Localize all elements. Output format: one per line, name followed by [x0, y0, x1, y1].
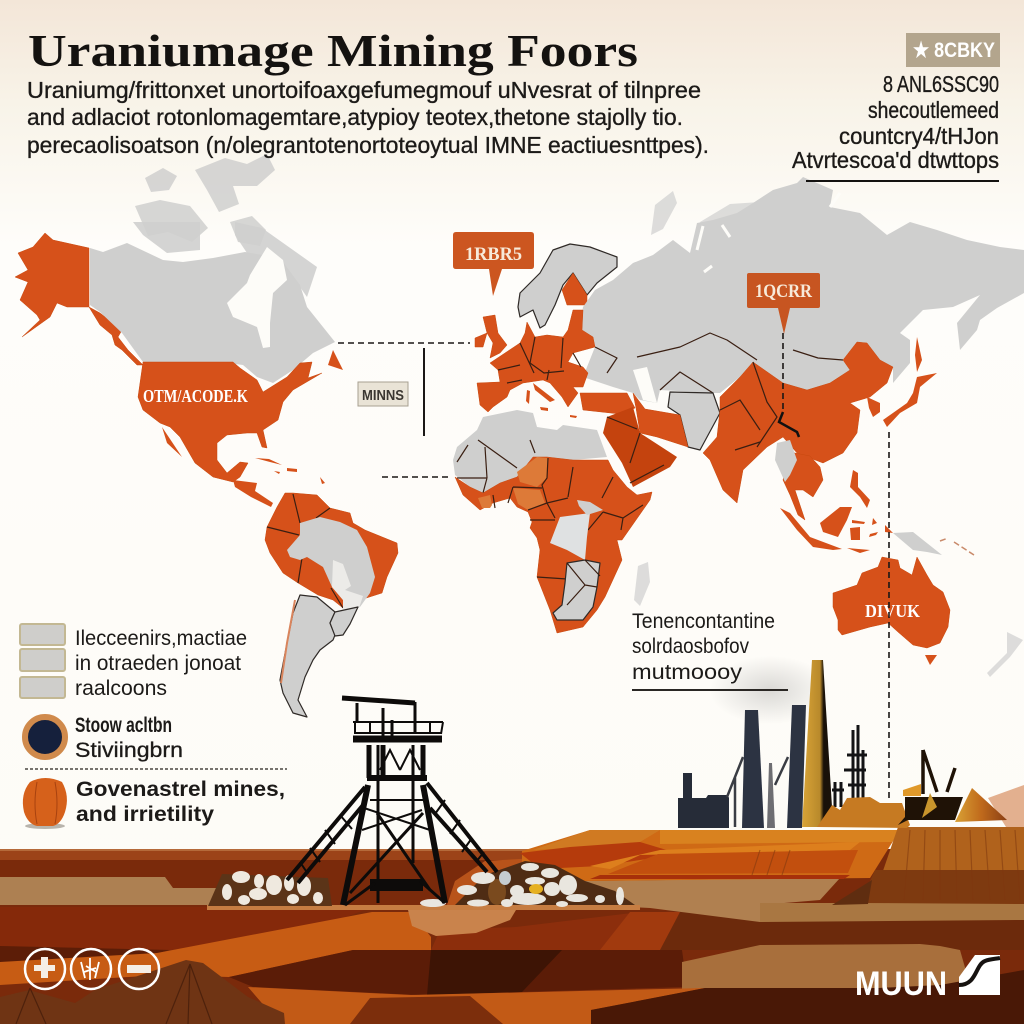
region: Arctic bays: [697, 193, 840, 272]
intro paragraph: perecaolisoatson (n/olegrantotenortoteoytual IMNE eactiuesnttpes).: [27, 132, 709, 158]
label: United States: OTM/ACODE.K: [143, 386, 248, 406]
region: Philippines: [850, 470, 870, 508]
rock pile: right: [420, 861, 635, 907]
region: Caspian Sea: [633, 367, 657, 403]
map annotation text: mutmoooy: [632, 661, 743, 684]
region: Myanmar dark border: [779, 412, 799, 437]
region: Baja California: [162, 427, 182, 457]
region: Pacific islands: [940, 538, 974, 555]
callout flag: Asia: 1QCRR: [755, 281, 812, 302]
region: Canada: [90, 243, 335, 383]
factory building: [678, 773, 729, 828]
legend item: conventional mines: Govenastrel mines,: [76, 778, 285, 801]
region: Afghanistan and Pakistan: [668, 392, 720, 450]
region: Central Africa interior: [550, 513, 590, 560]
ground platform: [207, 905, 640, 910]
gray chimney: [767, 763, 775, 828]
rock pile: left: [208, 871, 332, 906]
region: North Africa: [453, 410, 607, 493]
icon: plant: [71, 949, 111, 989]
bottom right dark: [591, 970, 1024, 1024]
region: Central Asia border lines: [595, 333, 843, 393]
region: Turkey: [580, 393, 635, 414]
world map: [15, 154, 1024, 717]
mid-map label box: MINNS: [362, 387, 404, 404]
top right callout: Atvrtescoa'd dtwttops: [792, 147, 999, 173]
region: northern fragments: [651, 191, 760, 235]
tan shield: [408, 910, 516, 936]
callout flag: Asia: [747, 273, 820, 334]
tan band left: [0, 877, 222, 905]
right dark band: [640, 912, 1024, 950]
region: Java and small islands: [847, 518, 893, 553]
map annotation text: [632, 610, 788, 690]
label: Australia: DIVUK: [865, 601, 920, 621]
logo: [855, 955, 1000, 1003]
region: Iran: [633, 393, 688, 447]
region: Italy and islands: [526, 383, 577, 418]
region: Chile edge: [281, 600, 295, 683]
legend item: reserves: in otraeden jonoat: [75, 652, 241, 675]
region: British Isles: [475, 315, 507, 358]
legend item: conventional mines: [23, 778, 285, 829]
map annotation text: solrdaosbofov: [632, 635, 749, 658]
region: Thailand interior: [775, 440, 797, 482]
smoke: [710, 656, 830, 724]
icon: plus: [25, 949, 65, 989]
striped hill: [873, 827, 1024, 904]
region: Korea: [867, 397, 880, 417]
region: East Africa lake: [577, 500, 603, 515]
region: Sub-Saharan Africa: [455, 457, 652, 633]
intro paragraph: [27, 77, 709, 158]
badge: ★ 8CBKY: [913, 39, 995, 62]
region: Indochina: [783, 452, 823, 520]
mine headframe tower: [287, 698, 497, 905]
mid-map label box: [358, 382, 408, 406]
icon row: [25, 949, 159, 989]
landscape: strata: [0, 827, 1024, 1024]
region: Central America: [233, 480, 273, 507]
chimney left: [742, 710, 764, 828]
region: New Guinea: [893, 532, 942, 555]
dark seam: [0, 946, 170, 962]
tan block right: [682, 944, 970, 991]
patch behind right rocks: [447, 857, 555, 905]
region: Eurasia: [580, 177, 1024, 403]
terrace: [522, 830, 900, 881]
top right callout: countcry4/tHJon: [839, 123, 999, 149]
intro paragraph: and adlaciot rotonlomagemtare,atypioy teotex,thetone stajolly tio.: [27, 104, 683, 130]
region: India and China: [703, 342, 893, 503]
region: Southern cone: [280, 595, 335, 717]
legend item: storage: [25, 714, 183, 762]
excavator: [898, 750, 963, 825]
region: South America north: [265, 493, 398, 608]
region: Hudson Bay: [227, 247, 287, 348]
region: Caribbean: [255, 458, 325, 484]
region: Alaska: [15, 233, 89, 337]
region: Arabia: [603, 407, 677, 487]
logo: MUUN: [855, 965, 947, 1003]
foreground hill texture: [16, 964, 212, 1024]
lower orange band: [248, 987, 705, 1024]
region: Newfoundland: [328, 350, 343, 370]
region: New Zealand: [987, 632, 1023, 677]
legend item: storage: Stiviingbrn: [75, 739, 183, 762]
callout flag: Europe: 1RBR5: [465, 244, 522, 265]
region: Uruguay: [330, 607, 358, 636]
legend: [20, 624, 287, 829]
legend item: conventional mines: and irrietility: [76, 803, 214, 826]
rock piles: [207, 861, 640, 910]
crane arms: [727, 757, 788, 827]
region: Sulawesi: [850, 527, 860, 540]
derrick: [832, 725, 867, 807]
region: West Africa lighter band: [478, 457, 548, 510]
region: Australia: [833, 557, 950, 648]
top right callout: shecoutlemeed: [868, 97, 999, 123]
frame legs: [343, 785, 445, 905]
leader lines: [338, 333, 889, 802]
tall stack: [802, 660, 832, 827]
region: Sumatra: [780, 508, 842, 550]
intro paragraph: Uraniumg/frittonxet unortoifoaxgefumegmouf uNvesrat of tilnpree: [27, 77, 701, 103]
chimney right: [787, 705, 806, 828]
tan band right: [585, 878, 840, 922]
legend item: reserves: raalcoons: [75, 677, 167, 700]
legend item: reserves: Ilecceenirs,mactiae: [75, 627, 247, 650]
region: Amazon interior: [287, 517, 375, 610]
region: Alaska panhandle: [89, 307, 143, 365]
region: Europe: [477, 310, 595, 412]
factory complex: [678, 660, 867, 828]
legend item: storage: Stoow acltbn: [75, 714, 172, 737]
logo mark: [959, 955, 1000, 995]
peach hill: [988, 785, 1024, 827]
region: Finland: [562, 273, 587, 305]
top right callout: [792, 33, 1000, 181]
mid red block: [431, 912, 760, 950]
region: Southern Africa interior: [553, 560, 600, 620]
region: United States and Mexico: [138, 362, 322, 482]
badge: [906, 33, 1000, 67]
callout flag: Europe: [453, 232, 534, 296]
region: Borneo: [820, 507, 852, 537]
legend item: reserves: [20, 624, 247, 700]
icon: minus: [119, 949, 159, 989]
region: Baffin and northern islands: [133, 222, 317, 297]
rock mound: [817, 797, 910, 828]
map annotation text: Tenencontantine: [632, 610, 775, 633]
title: Uraniumage Mining Foors: [28, 25, 638, 76]
region: Tasmania: [925, 655, 937, 665]
dark red band: [0, 907, 372, 950]
region: Scandinavia: [518, 244, 617, 328]
region: Madagascar: [634, 562, 650, 606]
orange sweep: [0, 912, 431, 985]
region: Japan: [883, 337, 937, 427]
dark blocks: [229, 950, 687, 995]
right cone: [955, 788, 1007, 822]
region: arctic islands: [135, 154, 275, 246]
region: Brazil highlight: [332, 560, 363, 610]
foreground dark hill: [0, 960, 285, 1024]
